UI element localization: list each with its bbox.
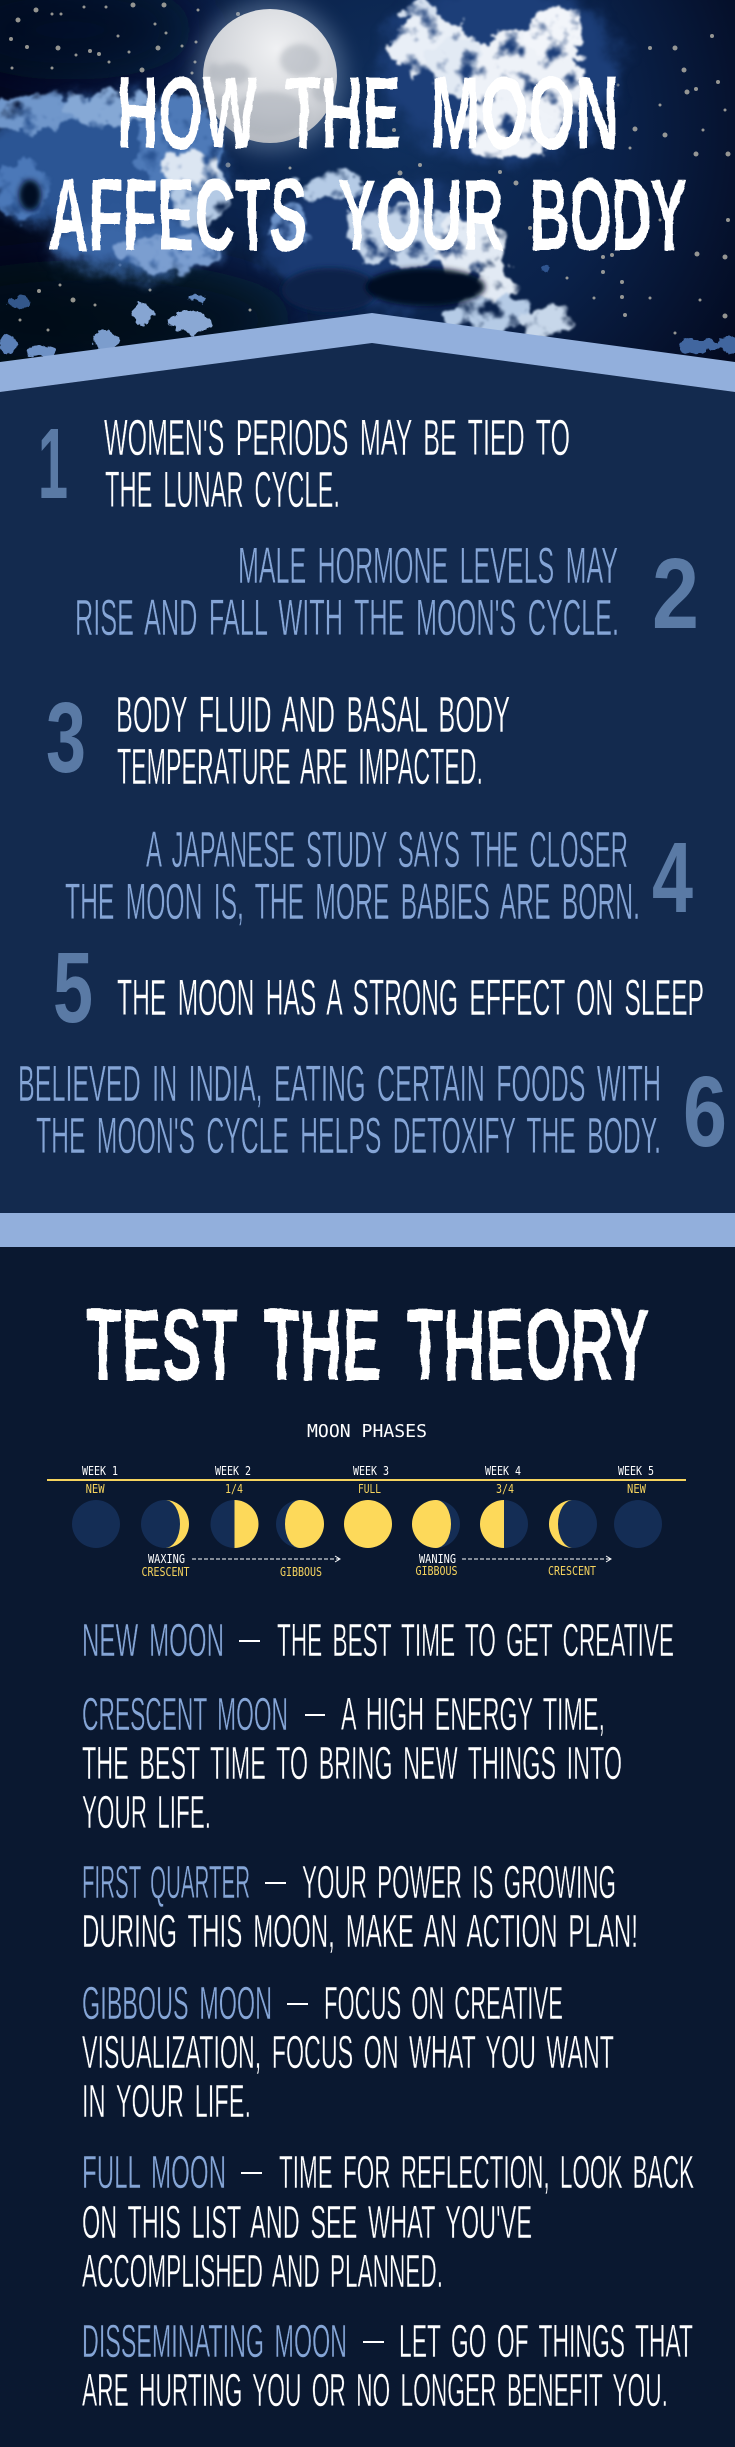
fact 2 [75,537,699,650]
first quarter advice: FIRST QUARTER [82,1856,250,1908]
new moon advice: NEW MOON [82,1614,224,1666]
moon phases chart: CRESCENT [142,1565,190,1579]
moon phases chart: GIBBOUS [280,1565,322,1579]
heading [85,1288,650,1402]
divider band [0,1213,735,1247]
main title [48,56,687,272]
full moon advice [82,2146,694,2297]
crescent moon advice [82,1688,622,1838]
fact 1 [38,408,570,520]
moon phases chart: CRESCENT [548,1564,596,1578]
fact 3: 3 [46,682,86,794]
icon: waxing gibbous [276,1500,324,1548]
gibbous moon advice [82,1977,614,2127]
fact 2: 2 [652,538,699,650]
moon phases chart [47,1421,686,1579]
icon: waning crescent [549,1500,597,1548]
panel: test the theory [0,1247,735,2447]
icon: new moon [72,1500,120,1548]
fact 4: 4 [652,822,693,934]
clouds [0,0,735,357]
moon [194,0,346,152]
disseminating moon advice [82,2315,693,2416]
heading: THE [264,1288,381,1402]
moon phases chart: WEEK 2 [215,1464,251,1478]
full moon advice: FULL MOON [82,2146,226,2198]
gibbous moon advice: GIBBOUS MOON [82,1977,272,2029]
icon: waxing crescent [141,1500,189,1548]
moon phases chart: WANING [419,1552,456,1566]
heading: TEST [85,1288,238,1402]
new moon advice [82,1614,674,1666]
main title: YOUR [338,158,504,272]
moon phases chart: 1/4 [225,1482,243,1496]
crescent moon advice: YOUR LIFE. [82,1786,211,1838]
main title: THE [286,56,401,170]
icon: full moon [344,1500,392,1548]
fact 5: 5 [53,932,93,1044]
fact 1: THE LUNAR CYCLE. [105,461,340,518]
gibbous moon advice: IN YOUR LIFE. [82,2075,251,2127]
main title: HOW [117,56,257,170]
header: night sky background [0,0,735,400]
moon phases chart: WAXING [148,1552,185,1566]
disseminating moon advice: DISSEMINATING MOON [82,2315,347,2367]
first quarter advice [82,1856,638,1957]
fact 4 [65,821,693,934]
moon phases chart: MOON PHASES [307,1421,427,1442]
fact 3 [46,682,510,795]
icon: last quarter [480,1500,528,1548]
icon: waning gibbous [412,1500,460,1548]
panel: body effects list [0,313,735,1213]
main title: AFFECTS [48,158,307,272]
moon phases chart: WEEK 5 [618,1464,654,1478]
moon phases chart: NEW [86,1482,105,1496]
icon: first quarter [210,1500,258,1548]
chevron band [0,313,735,392]
arrow: waning [462,1556,611,1562]
moon phases chart: WEEK 1 [82,1464,118,1478]
moon phases chart: FULL [358,1482,381,1496]
moon phases chart: NEW [627,1482,647,1496]
fact 6 [18,1055,727,1168]
moon phases chart: GIBBOUS [416,1564,458,1578]
fact 5 [53,932,704,1044]
arrow: waxing [192,1556,340,1562]
moon phases chart: 3/4 [496,1482,514,1496]
crescent moon advice: CRESCENT MOON [82,1688,288,1740]
moon phases chart: WEEK 4 [485,1464,521,1478]
icon: new moon [614,1500,662,1548]
fact 1: 1 [38,408,68,520]
moon phases chart: WEEK 3 [353,1464,389,1478]
